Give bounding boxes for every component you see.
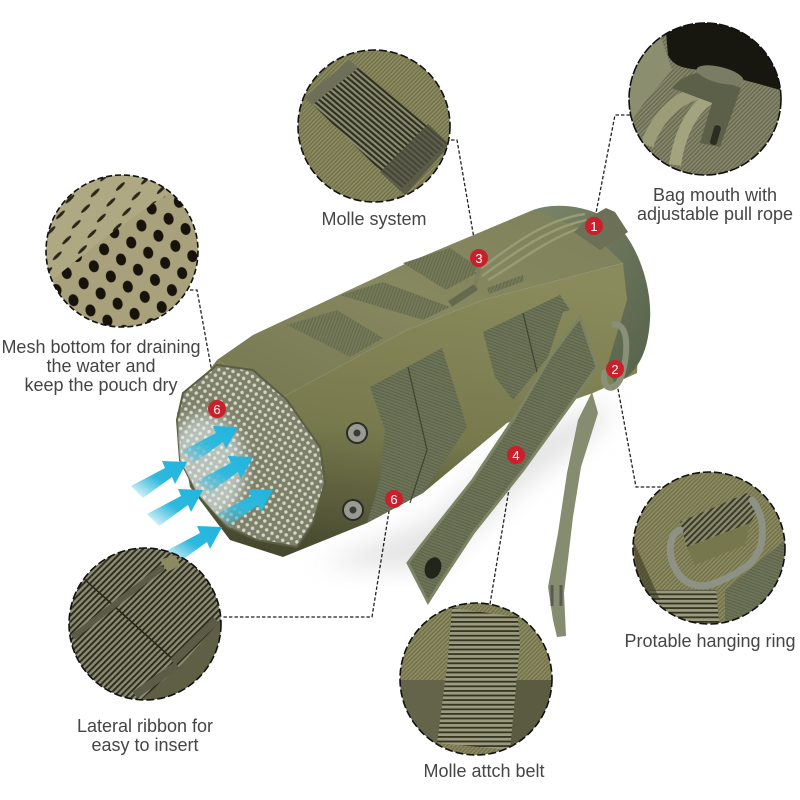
label: mesh bottom: Mesh bottom for draining [1, 337, 201, 357]
side molle straps lower [367, 348, 467, 523]
detail circle: hanging ring [633, 472, 790, 630]
D ring [604, 325, 626, 388]
cord lock [574, 208, 628, 250]
label: mesh bottom: keep the pouch dry [24, 375, 178, 395]
pouch illustration [131, 206, 650, 637]
detail circle: molle belt [400, 603, 552, 755]
rivets [343, 423, 367, 520]
label: bag mouth: adjustable pull rope [637, 204, 793, 224]
pouch side panel [177, 263, 640, 557]
belt hole [422, 555, 444, 581]
detail circle: molle system [298, 50, 450, 202]
upper molle straps [287, 310, 383, 357]
detail circle: mesh bottom [40, 170, 198, 327]
label: molle belt: Molle attch belt [423, 761, 545, 781]
drawcord [476, 214, 587, 280]
label: lateral ribbon: Lateral ribbon for [77, 716, 213, 736]
number badges: 6 [213, 402, 221, 417]
number badges: 4 [512, 448, 520, 463]
thin strap [548, 392, 598, 637]
mesh bottom [177, 365, 325, 547]
label: lateral ribbon: easy to insert [91, 735, 199, 755]
number badges: 6 [390, 492, 398, 507]
detail circle: bag mouth [628, 20, 790, 175]
number badges: 2 [611, 362, 619, 377]
pouch top panel [217, 208, 623, 397]
connector lines [190, 115, 664, 617]
side molle straps upper [483, 295, 570, 400]
number badges: 1 [590, 219, 598, 234]
pouch end cap [533, 206, 650, 384]
label: mesh bottom: the water and [46, 356, 156, 376]
snap on thin strap [552, 585, 561, 606]
label: hanging ring: Protable hanging ring [624, 631, 796, 651]
blue arrows [182, 426, 238, 463]
number badges: 3 [475, 251, 483, 266]
shadow under pouch [320, 400, 610, 570]
label: bag mouth: Bag mouth with [653, 185, 777, 205]
mesh glow [165, 415, 245, 525]
number badges [208, 217, 624, 508]
label: molle system: Molle system [321, 209, 427, 229]
molle belt strap [408, 317, 597, 602]
detail circle: lateral ribbon [69, 548, 225, 710]
